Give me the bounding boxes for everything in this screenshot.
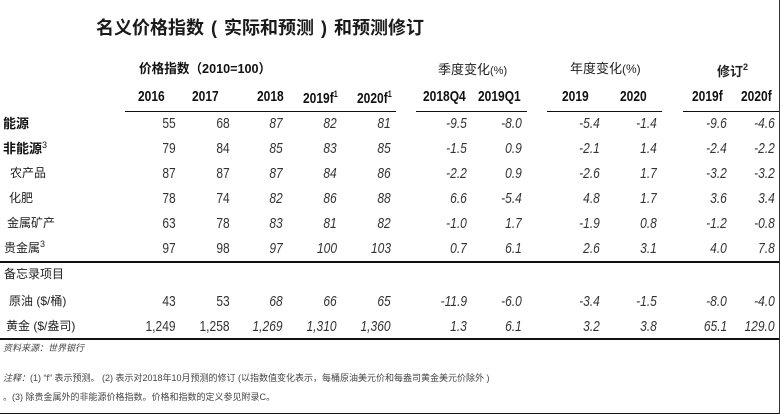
- row: metals and minerals: -1.0: [446, 215, 467, 232]
- row: energy: 55: [163, 115, 176, 132]
- row: fertilizer: 74: [217, 190, 230, 207]
- row: crude oil: 65: [378, 293, 391, 310]
- row: energy: 68: [217, 115, 230, 132]
- row: crude oil: 43: [163, 293, 176, 310]
- group heading: quarterly change: 季度变化(%): [438, 62, 507, 77]
- row: crude oil: -1.5: [636, 293, 657, 310]
- row: metals and minerals: 1.7: [505, 215, 522, 232]
- row: energy: -1.4: [636, 115, 657, 132]
- row: agriculture: 84: [324, 165, 337, 182]
- row: gold: 1,269: [253, 318, 283, 335]
- column headers: 2018Q4: [423, 88, 466, 105]
- row: non-energy: 85: [378, 140, 391, 157]
- column headers: 2018: [257, 88, 284, 105]
- row: non-energy: [3, 140, 775, 157]
- row: metals and minerals: 82: [378, 215, 391, 232]
- row: energy: 82: [324, 115, 337, 132]
- row: agriculture: 1.7: [640, 165, 657, 182]
- row: crude oil: -4.0: [754, 293, 775, 310]
- row: non-energy: 85: [270, 140, 283, 157]
- row: gold: 129.0: [745, 318, 775, 335]
- row: energy: [3, 115, 775, 132]
- row: fertilizer: 化肥: [9, 191, 33, 205]
- row: gold: 1.3: [450, 318, 467, 335]
- row: fertilizer: 86: [324, 190, 337, 207]
- footnotes: 注释：(1) “f” 表示预测。 (2) 表示对2018年10月预测的修订 (以指数值变化表示，每桶原油美元价和每盎司黄金美元价除外 ): [3, 373, 490, 383]
- row: fertilizer: 88: [378, 190, 391, 207]
- row: energy: -8.0: [501, 115, 522, 132]
- row: energy: 87: [270, 115, 283, 132]
- row: crude oil: -8.0: [706, 293, 727, 310]
- column headers: 2016: [138, 88, 165, 105]
- row: agriculture: 农产品: [10, 166, 46, 180]
- row: precious metals: 0.7: [450, 240, 467, 257]
- memo heading: 备忘录项目: [4, 267, 64, 281]
- group heading: annual change: 年度变化(%): [570, 61, 641, 76]
- row: crude oil: -6.0: [501, 293, 522, 310]
- row: metals and minerals: -1.9: [579, 215, 600, 232]
- row: metals and minerals: [7, 215, 775, 232]
- row: precious metals: 4.0: [710, 240, 727, 257]
- row: agriculture: 87: [217, 165, 230, 182]
- row: crude oil: 53: [217, 293, 230, 310]
- row: non-energy: -2.1: [579, 140, 600, 157]
- row: metals and minerals: 83: [270, 215, 283, 232]
- row: gold: 3.2: [583, 318, 600, 335]
- footnotes: [3, 373, 490, 402]
- row: crude oil: 原油 ($/桶): [9, 294, 66, 308]
- row: agriculture: 87: [270, 165, 283, 182]
- row: fertilizer: 78: [163, 190, 176, 207]
- row: non-energy: 0.9: [505, 140, 522, 157]
- row: agriculture: [10, 165, 775, 182]
- column headers: 2020f1: [357, 89, 392, 107]
- row: gold: 1,310: [307, 318, 337, 335]
- row: agriculture: -3.2: [706, 165, 727, 182]
- row: precious metals: [4, 239, 775, 257]
- group heading: revisions: 修订2: [717, 62, 748, 79]
- row: precious metals: 2.6: [583, 240, 600, 257]
- row: gold: 65.1: [704, 318, 727, 335]
- row: non-energy: 非能源3: [3, 140, 47, 156]
- column headers: 2017: [192, 88, 219, 105]
- title: 名义价格指数 ( 实际和预测 ) 和预测修订: [96, 18, 424, 38]
- row: energy: -9.5: [446, 115, 467, 132]
- row: precious metals: 97: [163, 240, 176, 257]
- column headers: 2019Q1: [478, 88, 521, 105]
- row: gold: 1,249: [146, 318, 176, 335]
- row: agriculture: 86: [378, 165, 391, 182]
- row: metals and minerals: 78: [217, 215, 230, 232]
- row: energy: 能源: [3, 116, 29, 131]
- row: non-energy: -2.2: [754, 140, 775, 157]
- source note: 资料来源：世界银行: [3, 343, 84, 353]
- row: precious metals: 6.1: [505, 240, 522, 257]
- row: fertilizer: 82: [270, 190, 283, 207]
- row: agriculture: 0.9: [505, 165, 522, 182]
- row: gold: 1,360: [361, 318, 391, 335]
- row: energy: -9.6: [706, 115, 727, 132]
- column headers: 2019: [562, 88, 589, 105]
- row: non-energy: -2.4: [706, 140, 727, 157]
- row: crude oil: 68: [270, 293, 283, 310]
- row: precious metals: 3.1: [640, 240, 657, 257]
- row: gold: 1,258: [200, 318, 230, 335]
- footnotes: 。(3) 除贵金属外的非能源价格指数。价格和指数的定义参见附录C。: [3, 392, 275, 402]
- group heading: price index: 价格指数（2010=100）: [139, 61, 271, 76]
- row: precious metals: 98: [217, 240, 230, 257]
- column headers: [138, 88, 772, 107]
- row: metals and minerals: 0.8: [640, 215, 657, 232]
- row: metals and minerals: 63: [163, 215, 176, 232]
- row: gold: 3.8: [640, 318, 657, 335]
- row: non-energy: -1.5: [446, 140, 467, 157]
- row: crude oil: 66: [324, 293, 337, 310]
- row: fertilizer: 6.6: [450, 190, 467, 207]
- row: precious metals: 贵金属3: [4, 239, 45, 255]
- column headers: 2019f1: [303, 89, 338, 107]
- column headers: 2019f: [692, 88, 723, 105]
- row: crude oil: -3.4: [579, 293, 600, 310]
- row: fertilizer: 1.7: [640, 190, 657, 207]
- row: fertilizer: [9, 190, 775, 207]
- column headers: 2020: [620, 88, 647, 105]
- row: non-energy: 83: [324, 140, 337, 157]
- row: energy: -5.4: [579, 115, 600, 132]
- row: precious metals: 100: [317, 240, 337, 257]
- row: agriculture: -3.2: [754, 165, 775, 182]
- row: energy: 81: [378, 115, 391, 132]
- row: metals and minerals: -0.8: [754, 215, 775, 232]
- row: agriculture: -2.2: [446, 165, 467, 182]
- row: metals and minerals: 81: [324, 215, 337, 232]
- row: metals and minerals: -1.2: [706, 215, 727, 232]
- row: crude oil: -11.9: [441, 293, 467, 310]
- row: gold: 黄金 ($/盎司): [6, 319, 75, 333]
- row: precious metals: 7.8: [758, 240, 775, 257]
- column headers: 2020f: [741, 88, 772, 105]
- row: energy: -4.6: [754, 115, 775, 132]
- row: fertilizer: 3.4: [758, 190, 775, 207]
- row: agriculture: 87: [163, 165, 176, 182]
- row: metals and minerals: 金属矿产: [7, 216, 55, 230]
- row: fertilizer: -5.4: [501, 190, 522, 207]
- row: crude oil: [9, 293, 775, 310]
- row: fertilizer: 3.6: [710, 190, 727, 207]
- row: gold: [6, 318, 775, 335]
- row: precious metals: 103: [371, 240, 391, 257]
- row: non-energy: 1.4: [640, 140, 657, 157]
- row: agriculture: -2.6: [579, 165, 600, 182]
- row: fertilizer: 4.8: [583, 190, 600, 207]
- row: gold: 6.1: [505, 318, 522, 335]
- row: precious metals: 97: [270, 240, 283, 257]
- row: non-energy: 79: [163, 140, 176, 157]
- row: non-energy: 84: [217, 140, 230, 157]
